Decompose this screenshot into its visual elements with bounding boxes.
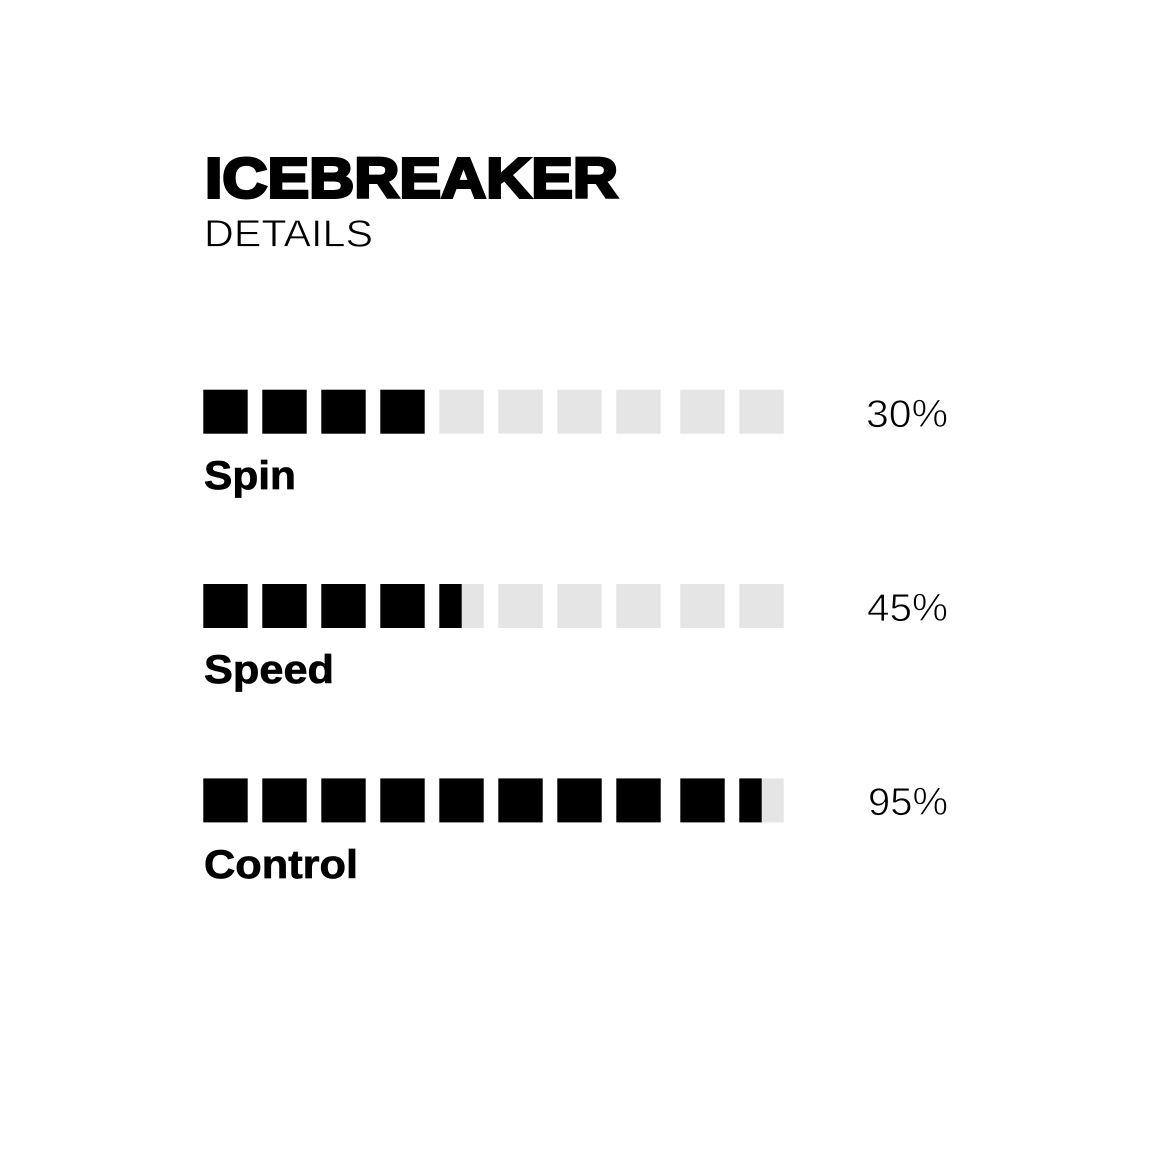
spin bar (203, 390, 784, 434)
title: ICEBREAKER (205, 146, 618, 210)
subtitle: DETAILS (204, 214, 373, 256)
row: speed (203, 584, 948, 692)
speed value: 45% (867, 587, 948, 630)
spin value: 30% (866, 393, 948, 436)
control label: Control (204, 843, 358, 887)
row: control (203, 778, 948, 887)
control bar (203, 778, 784, 822)
control value: 95% (868, 781, 948, 824)
speed label: Speed (204, 648, 334, 692)
speed bar (203, 584, 784, 628)
row: spin (203, 390, 948, 498)
spin label: Spin (204, 454, 296, 498)
